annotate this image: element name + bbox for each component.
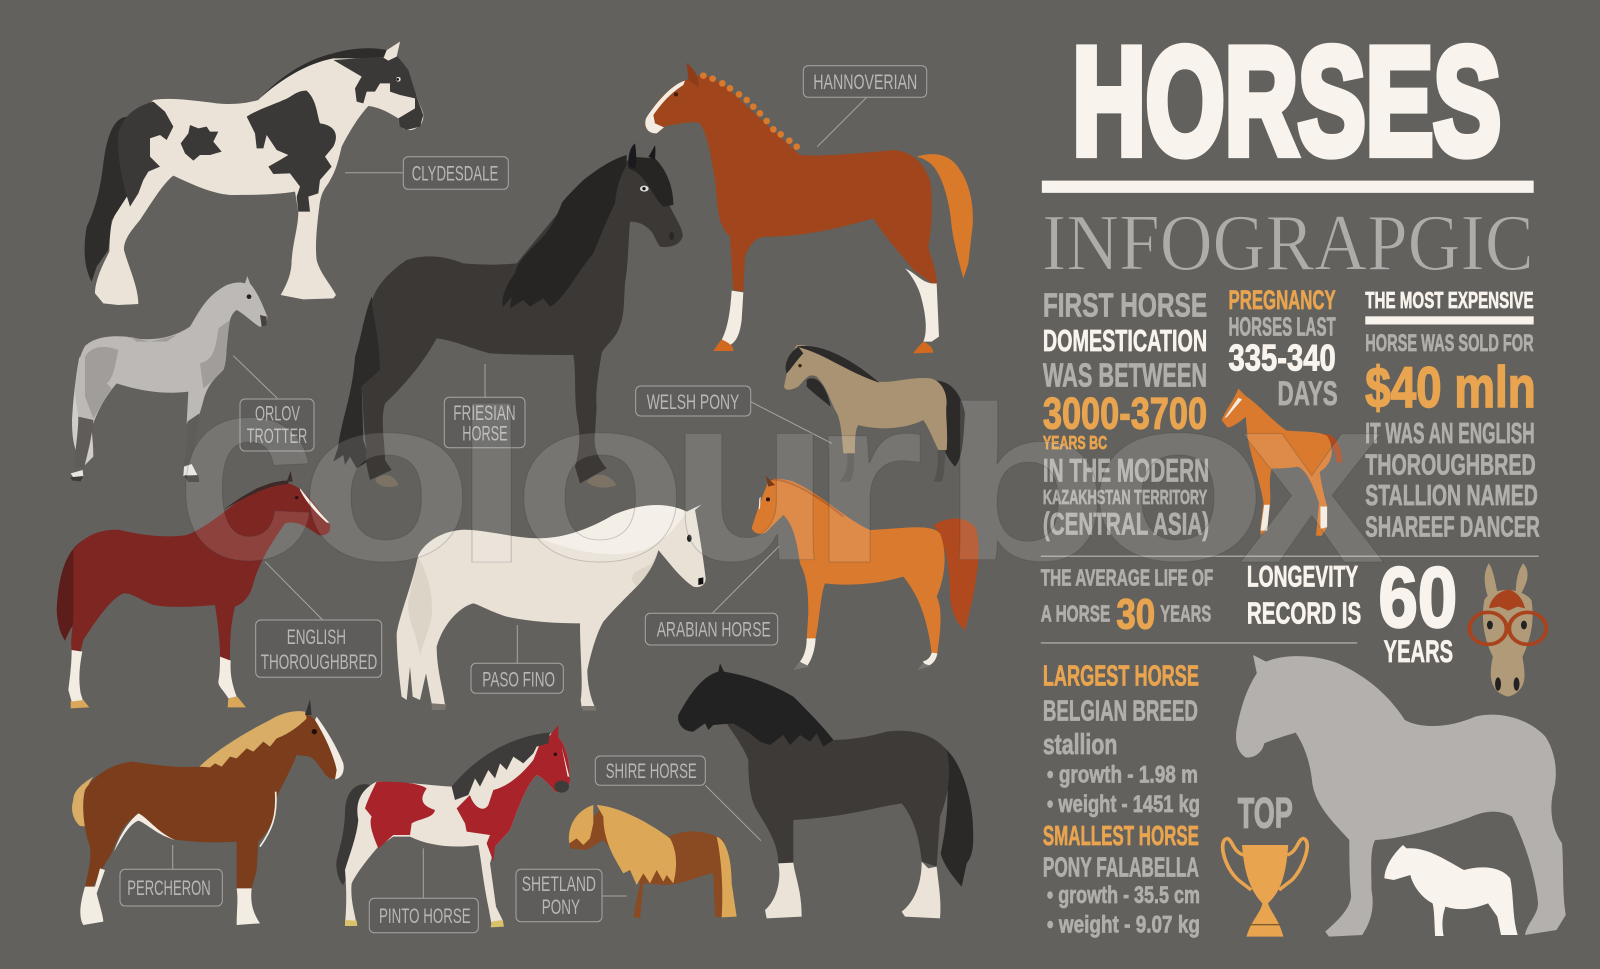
horse: Pinto xyxy=(336,725,570,927)
text block: smallest horse: • growth - 35.5 cm xyxy=(1047,882,1200,909)
text block: average life xyxy=(1041,565,1213,639)
label: Orlov Trotter: TROTTER xyxy=(247,425,307,448)
horse: Hannoverian xyxy=(645,63,973,353)
text block: largest horse: • growth - 1.98 m xyxy=(1047,762,1198,789)
horse: Paso Fino xyxy=(397,504,706,711)
watermark: colourbox: o xyxy=(298,346,474,610)
label: Shetland Pony xyxy=(516,869,627,922)
horse: Orlov Trotter xyxy=(70,276,267,482)
label: Percheron xyxy=(120,845,222,906)
label: Clydesdale xyxy=(345,157,508,189)
label: Pinto Horse: PINTO HORSE xyxy=(379,905,471,928)
horse: Shetland Pony xyxy=(569,805,737,918)
label: Pinto Horse xyxy=(369,848,478,933)
text block: first horse domestication: (CENTRAL ASIA) xyxy=(1043,506,1209,542)
text block: largest horse xyxy=(1043,661,1200,818)
text block: longevity record xyxy=(1247,550,1457,669)
text block: longevity record: YEARS xyxy=(1384,633,1453,669)
heading: TOP: TOP xyxy=(1238,790,1293,838)
label: Clydesdale: CLYDESDALE xyxy=(412,162,498,186)
text block: pregnancy: HORSES LAST xyxy=(1229,314,1336,342)
label: Shetland Pony: SHETLAND xyxy=(522,873,596,896)
horse: Shire xyxy=(678,663,973,918)
label: Shire Horse xyxy=(595,756,761,841)
text block: average life: YEARS xyxy=(1160,600,1211,626)
label: Friesian Horse: HORSE xyxy=(462,423,508,446)
title underline bar xyxy=(1042,181,1534,193)
text block: pregnancy: 335-340 xyxy=(1229,337,1336,378)
label: Welsh Pony: WELSH PONY xyxy=(647,391,739,414)
text block: most expensive horse: $40 mln xyxy=(1365,356,1536,420)
watermark: colourbox: l xyxy=(452,363,531,608)
text block: most expensive horse xyxy=(1365,287,1540,544)
text block: first horse domestication: WAS BETWEEN xyxy=(1043,358,1207,395)
label: English Thoroughbred: THOROUGHBRED xyxy=(261,651,377,674)
text block: pregnancy: DAYS xyxy=(1278,375,1338,413)
icon: horse head with glasses xyxy=(1470,563,1546,697)
label: Hannoverian xyxy=(803,66,927,147)
icon: trophy xyxy=(1223,838,1307,937)
text block: first horse domestication: YEARS BC xyxy=(1043,432,1107,453)
text block: longevity record: LONGEVITY xyxy=(1247,561,1358,594)
text block: largest horse: BELGIAN BREED xyxy=(1043,695,1198,727)
text block: smallest horse: • weight - 9.07 kg xyxy=(1047,912,1200,939)
text block: first horse domestication: FIRST HORSE xyxy=(1043,287,1207,324)
label: Friesian Horse: FRIESIAN xyxy=(453,402,516,425)
horse: Welsh Pony xyxy=(784,345,965,482)
watermark: colourbox: r xyxy=(808,346,925,613)
text block: longevity record: RECORD IS xyxy=(1247,596,1361,630)
text block: largest horse: stallion xyxy=(1043,729,1117,761)
label: Shire Horse: SHIRE HORSE xyxy=(606,760,697,783)
label: Welsh Pony xyxy=(636,386,832,443)
text block: pregnancy: PREGNANCY xyxy=(1229,285,1336,315)
text block: smallest horse xyxy=(1043,820,1200,939)
label: English Thoroughbred xyxy=(256,562,382,677)
text block: average life: 30 xyxy=(1116,591,1155,639)
label: Friesian Horse xyxy=(444,364,525,448)
label: Orlov Trotter xyxy=(233,356,314,451)
right info column xyxy=(1041,17,1540,939)
text block: first horse domestication: 3000-3700 xyxy=(1043,388,1207,439)
label: Paso Fino: PASO FINO xyxy=(482,668,555,692)
text block: smallest horse: SMALLEST HORSE xyxy=(1043,820,1199,851)
horse: Clydesdale xyxy=(85,42,423,305)
text block: average life: A HORSE xyxy=(1041,600,1110,626)
watermark: colourbox: o xyxy=(1088,347,1268,610)
text block: first horse domestication: DOMESTICATION xyxy=(1043,324,1207,358)
watermark: colourbox: o xyxy=(512,346,688,610)
text block: smallest horse: PONY FALABELLA xyxy=(1043,852,1199,883)
label: Arabian Horse: ARABIAN HORSE xyxy=(657,618,771,642)
watermark: colourbox: c xyxy=(176,321,317,614)
watermark: colourbox xyxy=(176,321,1386,614)
label: Shetland Pony: PONY xyxy=(542,896,580,919)
horse: Percheron xyxy=(72,699,344,925)
icon: small Falabella pony silhouette xyxy=(1384,845,1518,936)
text block: first horse domestication: KAZAKHSTAN TERRITORY xyxy=(1043,487,1207,509)
text block: first horse domestication xyxy=(1043,287,1209,542)
watermark: colourbox: b xyxy=(941,361,1109,607)
subtitle: INFOGRAPGIC: INFOGRAPGIC xyxy=(1042,198,1534,287)
horse: Arabian xyxy=(752,476,979,670)
watermark: colourbox: x xyxy=(1239,342,1386,614)
label: Paso Fino xyxy=(471,625,563,693)
text block: average life: THE AVERAGE LIFE OF xyxy=(1041,565,1213,591)
text block: largest horse: • weight - 1451 kg xyxy=(1047,791,1200,818)
label: Arabian Horse xyxy=(645,546,779,645)
label: Percheron: PERCHERON xyxy=(127,877,211,900)
horse: English Thoroughbred xyxy=(57,471,330,708)
icon: large Belgian horse silhouette xyxy=(1236,655,1566,937)
text block: longevity record: 60 xyxy=(1379,550,1457,646)
text block: first horse domestication: IN THE MODERN xyxy=(1043,452,1209,489)
text block: pregnancy xyxy=(1229,285,1338,413)
watermark: colourbox: u xyxy=(669,344,832,611)
text block: largest horse: LARGEST HORSE xyxy=(1043,661,1199,693)
label: Orlov Trotter: ORLOV xyxy=(255,403,300,426)
icon: foal xyxy=(1222,388,1342,536)
label: English Thoroughbred: ENGLISH xyxy=(287,626,346,649)
label: Hannoverian: HANNOVERIAN xyxy=(813,71,917,94)
horse: Friesian xyxy=(333,143,683,488)
